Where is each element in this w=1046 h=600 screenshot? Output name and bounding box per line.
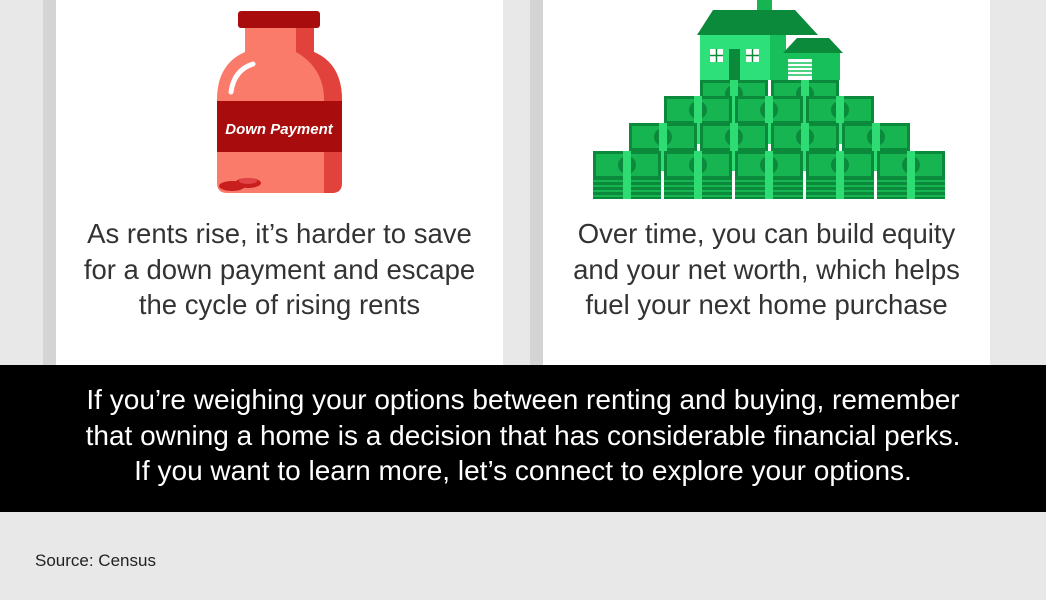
callout: conclusion band: If you’re weighing your options between renting and buying, remember: [86, 384, 960, 415]
text: down payment explanation: for a down payment and escape: [84, 254, 475, 284]
icon: down payment jar: [217, 11, 342, 193]
icon: down payment jar: Down Payment: [225, 121, 334, 138]
panel: equity: [543, 0, 990, 365]
callout: conclusion band: [0, 365, 1046, 512]
text: equity explanation: [573, 218, 960, 320]
callout: conclusion band: that owning a home is a decision that has considerable financial perks.: [86, 420, 960, 450]
callout: conclusion band: If you want to learn more, let’s connect to explore your options.: [134, 455, 912, 486]
text: down payment explanation: [84, 218, 475, 320]
icon: house on money pyramid: [593, 0, 945, 199]
text: down payment explanation: the cycle of rising rents: [139, 289, 420, 320]
text: equity explanation: fuel your next home purchase: [585, 289, 948, 320]
panel: down payment: [56, 0, 503, 365]
text: equity explanation: and your net worth, which helps: [573, 254, 960, 284]
source note: Source: Census: [35, 551, 156, 570]
text: down payment explanation: As rents rise, it’s harder to save: [87, 218, 472, 249]
text: equity explanation: Over time, you can build equity: [578, 218, 955, 249]
